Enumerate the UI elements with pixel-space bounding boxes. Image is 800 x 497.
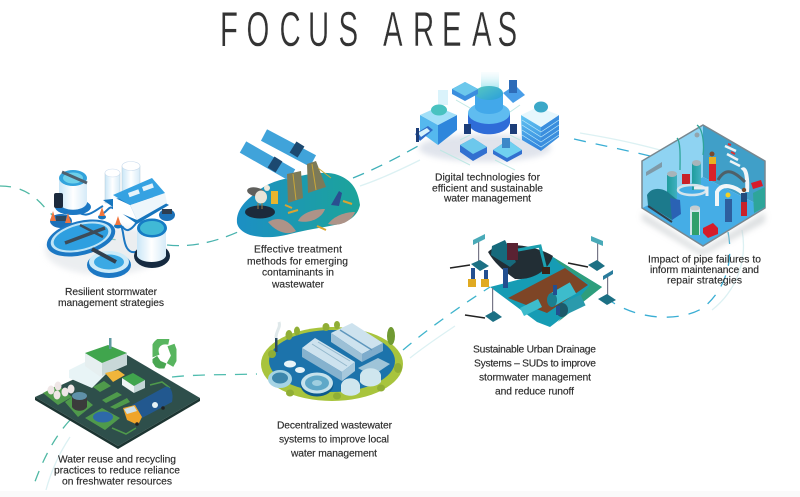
right tower <box>521 102 559 151</box>
caption: decentralized <box>277 420 393 460</box>
main building <box>69 338 127 388</box>
illustration: decentralized wastewater district <box>261 321 403 401</box>
caption: SUDs <box>473 344 596 398</box>
round clarifiers <box>268 370 334 396</box>
yellow crate <box>105 370 125 382</box>
dark tank <box>72 392 87 411</box>
caption: digital: water management <box>443 194 531 204</box>
caption: SUDs: Systems – SUDs to improve <box>474 358 596 370</box>
crates <box>468 279 489 287</box>
illustration: stormwater treatment plant <box>43 162 175 278</box>
smokestack <box>275 338 278 352</box>
tanker truck <box>123 387 173 426</box>
cones <box>98 207 122 228</box>
sludge blobs <box>268 209 355 233</box>
light towers <box>450 234 616 322</box>
caption: water reuse: practices to reduce reliance <box>54 466 180 476</box>
white pipes <box>717 169 747 206</box>
icon: recycling arrows <box>154 341 175 367</box>
caption: contaminants: Effective treatment <box>254 244 342 256</box>
workers <box>709 152 747 222</box>
ground sheet <box>490 257 602 327</box>
round pond <box>93 412 113 422</box>
pond <box>237 173 360 237</box>
factory building front <box>302 338 355 381</box>
caption: stormwater: management strategies <box>58 298 164 309</box>
caption: pipe failures: repair strategies <box>667 276 742 286</box>
connector: dashed path between focus areas <box>0 133 743 490</box>
floor <box>642 177 765 246</box>
caption: contaminants: contaminants in <box>262 268 334 278</box>
small modules <box>452 80 525 162</box>
pipes <box>522 288 583 317</box>
bottle and fish <box>331 191 342 206</box>
left block <box>415 90 457 145</box>
discharge <box>287 161 331 203</box>
silos <box>105 162 140 203</box>
round basin <box>87 249 131 278</box>
caption: contaminants: methods for emerging <box>247 256 348 268</box>
side annex <box>358 358 390 376</box>
boiler <box>647 189 681 222</box>
data beam <box>481 72 499 92</box>
illustration: contaminated outfall <box>237 135 360 237</box>
caption: SUDs: Sustainable Urban Drainage <box>473 344 596 356</box>
caption: digital: efficient and sustainable <box>432 184 543 194</box>
annex <box>122 373 145 393</box>
site slab <box>35 355 200 446</box>
caption: pipe failures <box>648 254 761 286</box>
right wall <box>703 125 765 208</box>
bottom edge tint <box>0 491 800 497</box>
settling tank <box>54 170 91 215</box>
excavator shadow <box>488 245 553 279</box>
caption: decentralized: Decentralized wastewater <box>277 420 393 432</box>
workers <box>471 268 560 315</box>
wall vent and gauge <box>646 162 662 176</box>
caption: contaminants <box>247 244 348 290</box>
figures <box>416 124 517 142</box>
pipes <box>243 135 313 175</box>
trees <box>268 321 402 400</box>
caption: stormwater <box>58 287 164 309</box>
green beds <box>43 381 130 430</box>
caption: water reuse: Water reuse and recycling <box>58 454 176 466</box>
caption: contaminants: wastewater <box>271 280 325 290</box>
trench <box>508 268 588 313</box>
domed tanks <box>284 360 381 396</box>
small platforms <box>50 209 175 228</box>
rock and bird <box>245 185 278 218</box>
toolbox and panel <box>703 223 718 238</box>
circuit lines <box>440 100 520 170</box>
excavator <box>491 240 550 274</box>
caption: pipe failures: Impact of pipe failures to <box>648 254 761 266</box>
dark pipe <box>718 172 745 182</box>
caption: SUDs: and reduce runoff <box>495 386 574 398</box>
storage tank <box>134 218 170 268</box>
oval basin <box>43 213 119 263</box>
illustration: pipe repair room <box>642 125 765 256</box>
green rim <box>261 327 403 401</box>
illustration: digital water technologies <box>415 72 559 170</box>
factory building rear <box>331 323 383 362</box>
title: FOCUS AREAS <box>220 1 517 57</box>
building <box>103 178 169 224</box>
room outline <box>642 125 765 246</box>
caption: decentralized: systems to improve local <box>279 434 389 446</box>
caption: decentralized: water management <box>290 448 377 460</box>
shelves <box>725 146 740 166</box>
illustration: water recycling site <box>35 338 200 449</box>
illustration: sustainable drainage excavation <box>450 234 616 327</box>
tanks <box>667 160 701 235</box>
room shadow <box>642 212 765 256</box>
caption: water reuse <box>54 454 180 488</box>
caption: stormwater: Resilient stormwater <box>65 287 158 298</box>
seated worker and loop <box>678 174 707 196</box>
chemical tanks <box>48 382 74 400</box>
pipes network <box>75 206 138 252</box>
caption: water reuse: on freshwater resources <box>62 476 172 488</box>
left wall <box>642 125 703 208</box>
caption: SUDs: stormwater management <box>479 372 591 384</box>
shadow <box>45 225 165 275</box>
caption: pipe failures: inform maintenance and <box>650 265 759 276</box>
caption: digital <box>432 172 543 204</box>
caption: digital: Digital technologies for <box>435 172 541 184</box>
central reactor <box>468 86 510 134</box>
wall pipes <box>677 125 703 170</box>
green pipes <box>112 382 170 434</box>
blue base <box>269 330 395 392</box>
drop shadow <box>419 134 551 162</box>
